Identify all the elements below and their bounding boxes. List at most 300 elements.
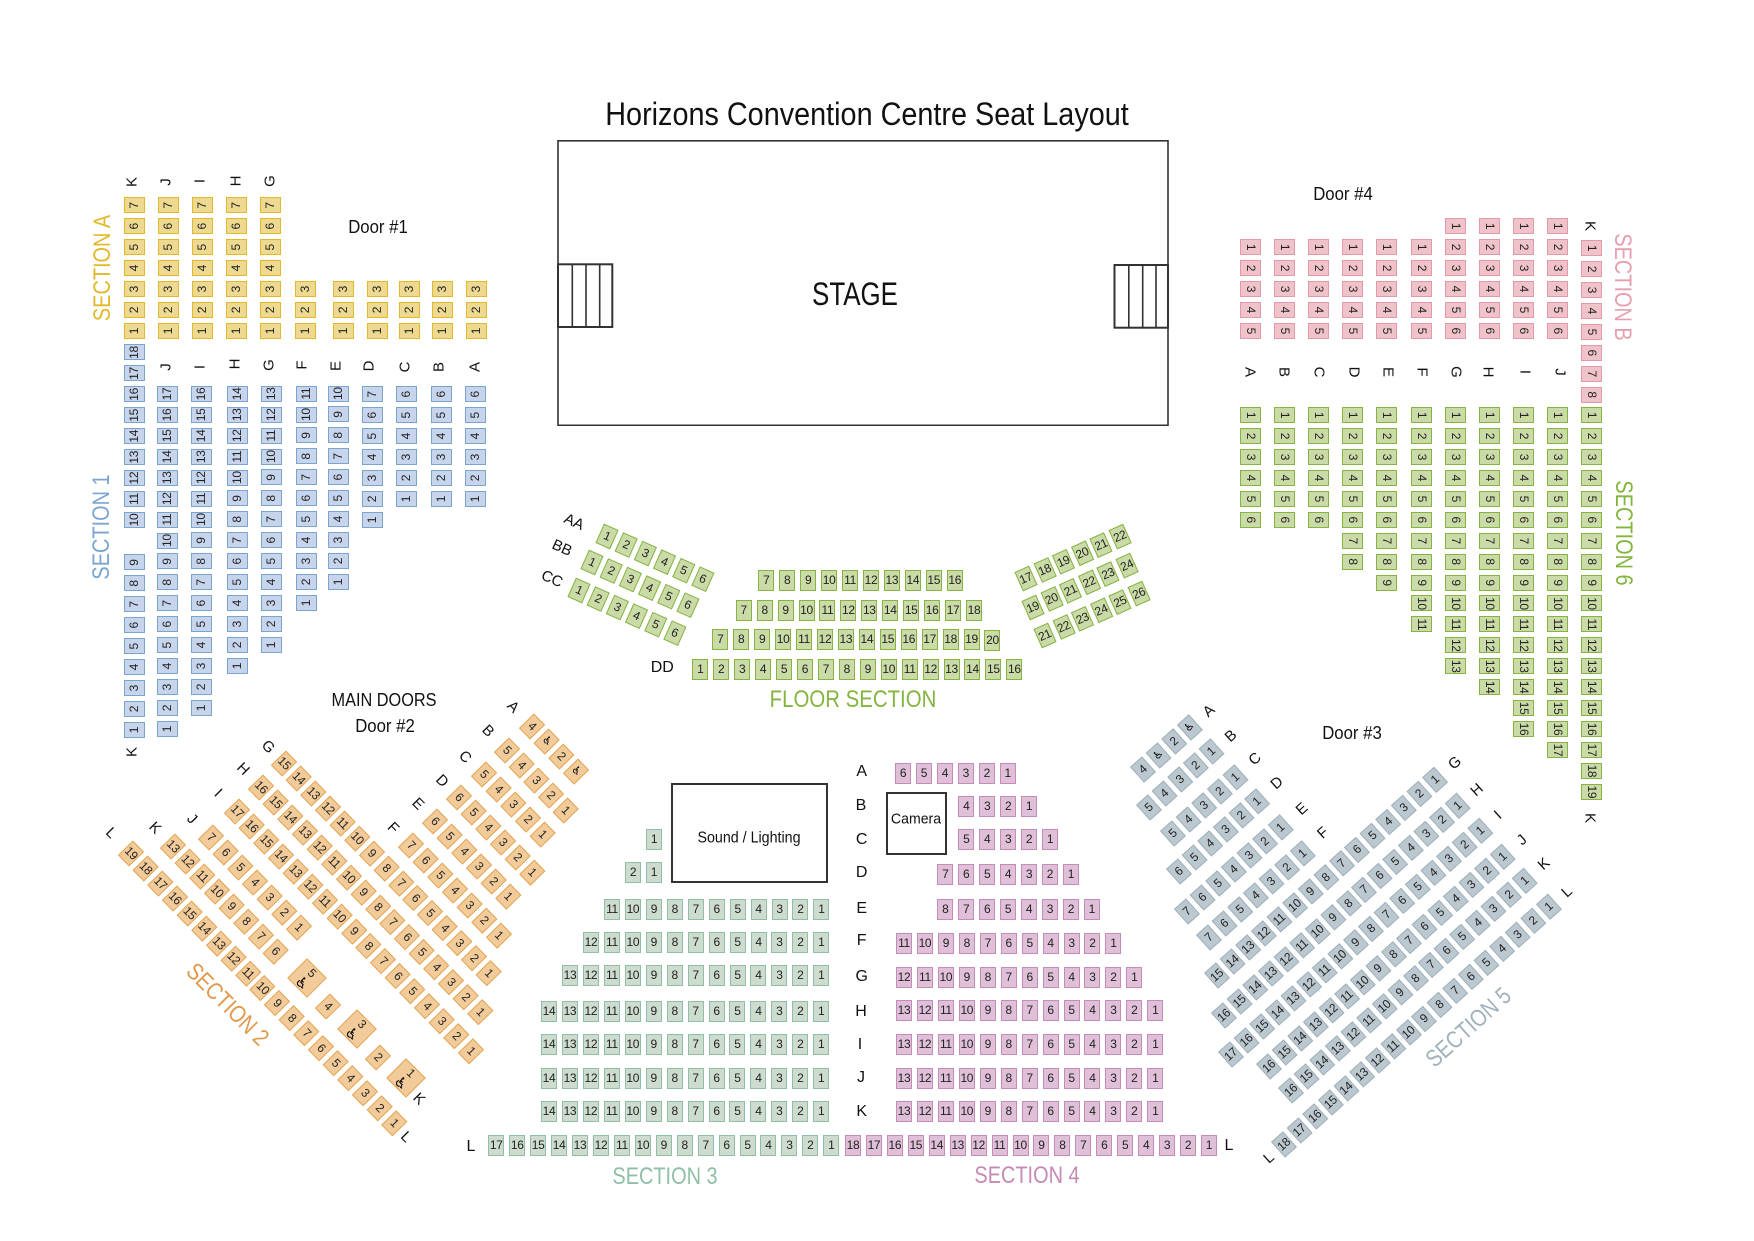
- section 2 heading: SECTION 2: [180, 958, 274, 1051]
- row K: 6: [1585, 349, 1599, 356]
- row J: 11: [160, 513, 174, 525]
- row J: 9: [1551, 579, 1565, 586]
- row G: 11: [334, 814, 352, 832]
- row D: 4: [1346, 475, 1360, 481]
- row I: 8: [1364, 921, 1378, 935]
- row DD: 5: [781, 662, 787, 676]
- row E: 6: [1195, 889, 1210, 904]
- row I: 17: [228, 801, 247, 820]
- row E: 2: [1380, 265, 1394, 271]
- row F: 6: [1006, 936, 1012, 950]
- accessible seat 5: ♿: [291, 972, 313, 994]
- row F: 5: [1026, 936, 1033, 950]
- row I: 6: [194, 600, 208, 606]
- row letter H: H: [233, 759, 253, 779]
- row H: 6: [1483, 516, 1497, 523]
- row I: 14: [194, 429, 208, 442]
- row A: 6: [900, 766, 906, 780]
- row B: 1: [1204, 744, 1218, 758]
- row I: 7: [692, 1037, 699, 1051]
- row H: 3: [230, 621, 244, 627]
- row H: 10: [960, 1003, 973, 1017]
- row I: 1: [1152, 1037, 1158, 1051]
- row D: 1: [365, 516, 379, 523]
- row CC centre: [712, 629, 1000, 650]
- row G: 2: [797, 968, 804, 982]
- row F: 9: [1415, 579, 1429, 586]
- row J: 15: [1275, 1043, 1294, 1062]
- row A: 4: [1136, 762, 1150, 776]
- row B: 3: [1278, 286, 1292, 292]
- row CC: 2: [593, 590, 604, 606]
- row G: 2: [263, 307, 277, 313]
- row I: 2: [194, 684, 208, 690]
- row I: 12: [301, 876, 320, 895]
- row L: 3: [1164, 1138, 1170, 1152]
- row E: 6: [714, 902, 720, 916]
- row L: 13: [574, 1138, 586, 1152]
- row K: 14: [1312, 1053, 1331, 1072]
- row C: 3: [506, 796, 521, 811]
- row E: 5: [443, 829, 457, 843]
- row I: 1: [1517, 412, 1531, 418]
- row I: 6: [195, 223, 209, 230]
- row A: 5: [1244, 328, 1258, 334]
- row L: 6: [723, 1138, 730, 1152]
- row letter J: J: [158, 364, 174, 371]
- row K: 1: [818, 1104, 824, 1118]
- row F: 9: [299, 432, 313, 439]
- row BB: 5: [663, 588, 674, 604]
- row H: 11: [325, 853, 343, 871]
- section 6 heading: SECTION 6: [1610, 480, 1637, 586]
- row B: 2: [544, 788, 559, 802]
- row J: [896, 1068, 1163, 1089]
- row G: 11: [1270, 910, 1288, 929]
- row C: 5: [1166, 826, 1180, 840]
- row H: 14: [1483, 681, 1497, 694]
- row D: 5: [1346, 496, 1360, 502]
- row J: 6: [1417, 919, 1432, 934]
- row J: 3: [1551, 454, 1565, 460]
- row letter F: F: [293, 360, 310, 370]
- row J: 5: [1551, 496, 1565, 502]
- row DD: 1: [697, 662, 703, 676]
- row J: [1547, 218, 1568, 339]
- row K: 11: [194, 866, 212, 885]
- row E: 5: [1380, 328, 1394, 334]
- row B: [1274, 407, 1295, 528]
- row L: 17: [490, 1138, 503, 1152]
- row I: 3: [1110, 1037, 1117, 1051]
- row I: 11: [1517, 618, 1531, 630]
- row J: 8: [1006, 1071, 1012, 1085]
- row A: 3: [1244, 286, 1258, 292]
- row DD: 12: [924, 662, 937, 676]
- row K: 3: [776, 1104, 782, 1118]
- row A: 2: [555, 749, 569, 763]
- row J: 11: [606, 1071, 618, 1085]
- row I: 13: [286, 861, 305, 880]
- row I: 8: [1006, 1037, 1012, 1051]
- row letter B: B: [856, 797, 866, 814]
- row K: 6: [1047, 1104, 1054, 1118]
- row L: 14: [1337, 1078, 1355, 1097]
- row D: 4: [365, 454, 379, 460]
- row H: 8: [1483, 558, 1497, 565]
- row F: 10: [1415, 597, 1429, 610]
- row H: 3: [1419, 826, 1433, 840]
- section B heading: SECTION B: [1609, 233, 1636, 341]
- row L: 18: [1274, 1134, 1293, 1153]
- row H: 5: [415, 945, 429, 959]
- row CC centre: 12: [819, 632, 831, 646]
- row J: 13: [1551, 660, 1565, 673]
- row H: 11: [230, 450, 244, 462]
- row CC right: 22: [1055, 617, 1072, 635]
- row letter BB: BB: [550, 536, 575, 560]
- row G: 15: [275, 753, 294, 772]
- row K: 10: [1585, 597, 1599, 610]
- row I: 7: [195, 202, 209, 209]
- row F: 1: [1415, 412, 1429, 418]
- row J: 2: [1551, 433, 1565, 439]
- row I: 5: [195, 244, 209, 250]
- row AA centre: 12: [865, 573, 877, 587]
- row I: 12: [1517, 639, 1531, 652]
- row D: 2: [365, 496, 379, 502]
- row letter C: C: [856, 831, 867, 848]
- row G: 1: [264, 642, 278, 648]
- row G: 14: [1223, 952, 1241, 971]
- row K lower seats: 4: [126, 664, 140, 670]
- row F: 11: [1415, 618, 1429, 630]
- row letter K: K: [1535, 854, 1553, 874]
- row K: 7: [254, 928, 269, 943]
- row G: 3: [1449, 454, 1463, 460]
- row CC right: 25: [1111, 592, 1129, 610]
- row K: 3: [1110, 1104, 1117, 1118]
- row L: 6: [314, 1041, 329, 1055]
- row F: 2: [1089, 936, 1096, 950]
- row letter H: H: [227, 175, 244, 186]
- row letter A: A: [1200, 701, 1218, 721]
- row DD: 3: [739, 662, 745, 676]
- row CC centre: 9: [759, 632, 765, 646]
- row A: 3: [1244, 454, 1258, 460]
- row CC centre: 15: [881, 632, 894, 646]
- row BB centre: 8: [761, 603, 768, 617]
- row I: 11: [316, 891, 334, 910]
- row I: 3: [435, 1013, 449, 1028]
- row F: 8: [299, 453, 313, 460]
- row H: 2: [1131, 1003, 1138, 1017]
- row A: 6: [1244, 516, 1258, 523]
- row C: [396, 386, 417, 507]
- row J: 6: [219, 845, 234, 859]
- row F: 4: [1047, 936, 1054, 950]
- row A: 4: [525, 719, 540, 734]
- row K: 13: [1328, 1039, 1347, 1058]
- row L: 13: [210, 933, 229, 952]
- row J: 6: [161, 223, 175, 230]
- row L: 6: [1101, 1138, 1107, 1152]
- row K: 5: [1455, 929, 1469, 944]
- row L: 12: [1368, 1050, 1387, 1069]
- row K: 15: [1297, 1067, 1316, 1086]
- row C: 2: [1312, 265, 1326, 271]
- row E: [422, 809, 521, 910]
- row G: 4: [264, 579, 278, 585]
- row H: 5: [230, 579, 244, 585]
- row AA: 2: [620, 536, 632, 552]
- row K: 6: [1439, 943, 1454, 958]
- row I: 4: [420, 998, 434, 1013]
- row E: 7: [331, 453, 345, 460]
- row I: 7: [194, 579, 208, 585]
- seat K4: [315, 993, 341, 1019]
- row H: 6: [1483, 328, 1497, 334]
- row H: 6: [400, 930, 415, 944]
- row J: [1256, 844, 1516, 1080]
- row K: 1: [1517, 873, 1531, 888]
- row letter K: K: [856, 1103, 867, 1120]
- row F: 7: [1202, 930, 1216, 944]
- row H: [226, 197, 247, 339]
- row H: 9: [230, 495, 244, 501]
- row C: 1: [1312, 244, 1326, 250]
- row G: [1445, 407, 1466, 674]
- row J: 7: [1026, 1071, 1033, 1085]
- row G: 13: [264, 387, 278, 400]
- row J: 7: [1402, 933, 1416, 948]
- row H: 2: [459, 990, 473, 1004]
- row C: 4: [399, 433, 413, 439]
- row K upper seats: 18: [126, 346, 140, 359]
- row DD: 13: [945, 662, 958, 676]
- row I: 6: [1517, 328, 1531, 334]
- row K: 8: [1585, 391, 1599, 397]
- row I: [1218, 817, 1493, 1067]
- row E: 5: [331, 495, 345, 501]
- row letter L: L: [1558, 883, 1575, 901]
- row D: 2: [370, 307, 384, 313]
- row J: 7: [1551, 537, 1565, 544]
- row C: 2: [399, 475, 413, 481]
- panel: section 2: [100, 695, 595, 1150]
- row F: 8: [672, 935, 678, 949]
- row B: 5: [1142, 800, 1156, 814]
- row G: 13: [564, 968, 576, 982]
- row G: 7: [1006, 970, 1012, 984]
- row L: 1: [1206, 1138, 1212, 1152]
- row J: 9: [160, 558, 174, 564]
- row J: 15: [160, 429, 174, 442]
- row A: 1: [468, 496, 482, 502]
- row I: 12: [1299, 975, 1318, 993]
- row H: 11: [1292, 936, 1311, 954]
- row I: 4: [194, 642, 208, 648]
- row B: 1: [434, 496, 448, 502]
- row H: 12: [1483, 639, 1497, 652]
- row D: 3: [365, 475, 379, 481]
- row E: 7: [693, 902, 699, 916]
- row F: [398, 832, 512, 948]
- row AA centre: 10: [823, 573, 835, 587]
- row I: 10: [194, 513, 208, 526]
- row K: 4: [1471, 915, 1485, 930]
- row I: 16: [1237, 1030, 1255, 1049]
- row letter B: B: [478, 721, 497, 740]
- row letter L: L: [467, 1138, 475, 1155]
- row H: 11: [1483, 618, 1497, 630]
- row F: 5: [734, 935, 741, 949]
- row C: [958, 829, 1058, 850]
- row I: 12: [194, 471, 208, 484]
- row I: 10: [330, 906, 349, 925]
- row E: 6: [331, 474, 345, 480]
- row letter F: F: [384, 819, 403, 838]
- row A: 3: [469, 286, 483, 292]
- row BB right: 21: [1061, 581, 1079, 599]
- row H: 4: [1483, 286, 1497, 292]
- row F: 6: [1415, 516, 1429, 523]
- row L: 14: [553, 1138, 565, 1152]
- row G: 9: [651, 968, 657, 982]
- row K upper seats: 11: [126, 493, 140, 505]
- row H: 10: [339, 867, 358, 886]
- row J: 14: [543, 1071, 555, 1085]
- row I: 1: [195, 328, 209, 334]
- row H: [248, 774, 493, 1025]
- row J: 7: [160, 600, 174, 606]
- row E: [1376, 407, 1397, 590]
- row I: 4: [1426, 865, 1440, 879]
- row BB right: 20: [1043, 589, 1060, 607]
- row F: 4: [1415, 475, 1429, 481]
- row A: 5: [921, 766, 927, 780]
- row E: [328, 386, 349, 590]
- row H: 2: [229, 307, 243, 313]
- row K lower seats: [124, 554, 145, 738]
- row I: 8: [194, 558, 208, 564]
- row letter F: F: [857, 932, 867, 949]
- row L: 11: [994, 1138, 1005, 1152]
- row A: [895, 763, 1016, 784]
- door label #4: Door #4: [1314, 184, 1373, 204]
- row I: 16: [242, 816, 261, 835]
- row E: 4: [1026, 902, 1032, 916]
- section 1 heading: SECTION 1: [88, 474, 115, 579]
- row L: 9: [1417, 1010, 1431, 1025]
- row B: 6: [1278, 516, 1292, 523]
- row DD: 6: [802, 662, 808, 676]
- row H: 8: [1341, 895, 1355, 910]
- row L: 3: [786, 1138, 793, 1152]
- row letter A: A: [1242, 367, 1258, 377]
- row L: 13: [951, 1138, 964, 1152]
- row I: 7: [1026, 1037, 1033, 1051]
- row L: 4: [765, 1138, 772, 1152]
- row letter C: C: [1311, 367, 1328, 378]
- row B: 1: [1278, 412, 1292, 418]
- row I: 17: [1221, 1044, 1240, 1063]
- row K: 10: [960, 1104, 973, 1118]
- panel: section 5: [1125, 700, 1580, 1170]
- row AA: [595, 523, 714, 591]
- row C: 1: [1228, 770, 1242, 784]
- row letter D: D: [432, 771, 452, 791]
- row K: 6: [126, 223, 140, 230]
- row letter H: H: [1468, 780, 1487, 800]
- row K lower seats: 3: [126, 684, 140, 691]
- row J: 12: [160, 492, 174, 505]
- row A: [1240, 239, 1261, 339]
- row H: 9: [1326, 909, 1340, 924]
- row H: 14: [543, 1004, 555, 1018]
- row J: 11: [940, 1071, 952, 1085]
- row C: 1: [651, 832, 657, 846]
- row BB right: 22: [1080, 573, 1098, 591]
- row F: 7: [692, 935, 699, 949]
- row D: 7: [942, 867, 948, 881]
- row J: 3: [1464, 877, 1478, 892]
- row D: 5: [467, 805, 482, 819]
- row F: 5: [1415, 328, 1429, 334]
- row G: 3: [1089, 970, 1096, 984]
- row A: 3: [963, 766, 969, 780]
- row C: 2: [402, 307, 416, 313]
- row I: 1: [818, 1037, 824, 1051]
- row A: 2: [1244, 433, 1258, 439]
- row D: 2: [630, 865, 636, 879]
- row L: 13: [1352, 1064, 1371, 1083]
- row AA right: 17: [1017, 569, 1035, 587]
- row CC centre: 10: [777, 632, 789, 646]
- row K: 16: [1585, 723, 1599, 735]
- row I: 8: [361, 938, 376, 953]
- row letter D: D: [360, 360, 378, 371]
- row H: 1: [473, 1005, 488, 1019]
- row E: 4: [1227, 861, 1241, 876]
- row F: 7: [985, 936, 991, 950]
- row B: 3: [1278, 454, 1292, 460]
- row DD: 2: [718, 662, 724, 676]
- row L: 4: [343, 1071, 358, 1085]
- row H: 2: [797, 1004, 803, 1018]
- row K: 5: [734, 1104, 741, 1118]
- accessible seat 1: [386, 1058, 425, 1098]
- door label #3: Door #3: [1322, 723, 1381, 743]
- row H: 3: [1483, 265, 1497, 271]
- row K: 8: [1006, 1104, 1012, 1118]
- row L: 15: [180, 903, 199, 922]
- row G: 3: [1449, 265, 1463, 271]
- row K: 7: [1424, 957, 1438, 972]
- row E: 4: [755, 902, 762, 916]
- row L: 7: [1080, 1138, 1086, 1152]
- row letter J: J: [857, 1069, 865, 1086]
- row C: 3: [399, 454, 413, 460]
- row K: 9: [1585, 579, 1599, 586]
- row A: [1130, 714, 1203, 782]
- row K: 18: [1585, 765, 1599, 777]
- row L: 1: [1542, 899, 1556, 913]
- row H: 7: [1483, 537, 1497, 544]
- row I: 3: [195, 286, 209, 292]
- row G: [1445, 218, 1466, 339]
- row G: 3: [776, 968, 783, 982]
